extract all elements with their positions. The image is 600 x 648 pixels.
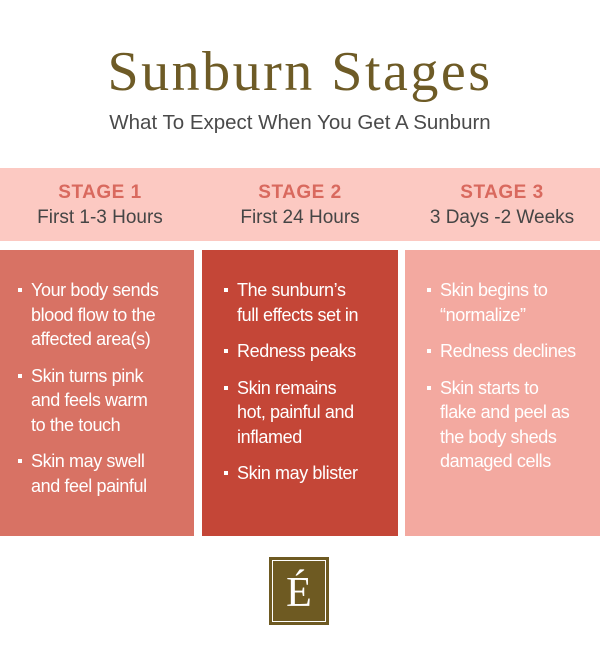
panel: stage 3: Redness declines [440,341,576,361]
panel: stage 2: Redness peaks [237,341,356,361]
panel: stage 1: and feels warm [31,390,147,410]
panel: stage 1: affected area(s) [31,329,150,349]
panel: stage 2: inflamed [237,426,302,446]
heading: stage 1: STAGE 1 [58,182,142,203]
heading: stage 3: 3 Days -2 Weeks [430,207,574,228]
panel: stage 2: hot, painful and [237,402,354,422]
subtitle: What To Expect When You Get A Sunburn [109,111,491,134]
panel: stage 1: Skin may swell [31,451,144,471]
panel: stage 1: to the touch [31,414,120,434]
logo [269,557,329,625]
heading: stage 1 [37,182,163,228]
panel: stage 2: The sunburn’s [237,280,346,300]
panel: stage 3 [405,250,600,536]
heading: stage 2: STAGE 2 [258,182,342,203]
panel: stage 2: Skin may blister [237,463,358,483]
heading: stage 1: First 1-3 Hours [37,207,163,228]
heading: stage 3 [430,182,574,228]
panel: stage 1: Your body sends [31,280,158,300]
header band [0,168,600,241]
panel: stage 3: Skin begins to [440,280,547,300]
panel: stage 3: the body sheds [440,426,556,446]
heading: stage 3: STAGE 3 [460,182,544,203]
title: Sunburn Stages [108,41,492,103]
panel: stage 1: blood flow to the [31,304,155,324]
panel: stage 3: Skin starts to [440,378,538,398]
heading: stage 2 [240,182,360,228]
panel: stage 2: Skin remains [237,378,336,398]
heading: stage 2: First 24 Hours [240,207,360,228]
logo: É [286,570,312,616]
panel: stage 2: full effects set in [237,304,358,324]
panel: stage 1: Skin turns pink [31,366,143,386]
panel: stage 3: flake and peel as [440,402,569,422]
panel: stage 2 [202,250,398,536]
panel: stage 1: and feel painful [31,476,147,496]
panel: stage 1 [0,250,194,536]
panel: stage 3: “normalize” [440,304,526,324]
panel: stage 3: damaged cells [440,451,551,471]
